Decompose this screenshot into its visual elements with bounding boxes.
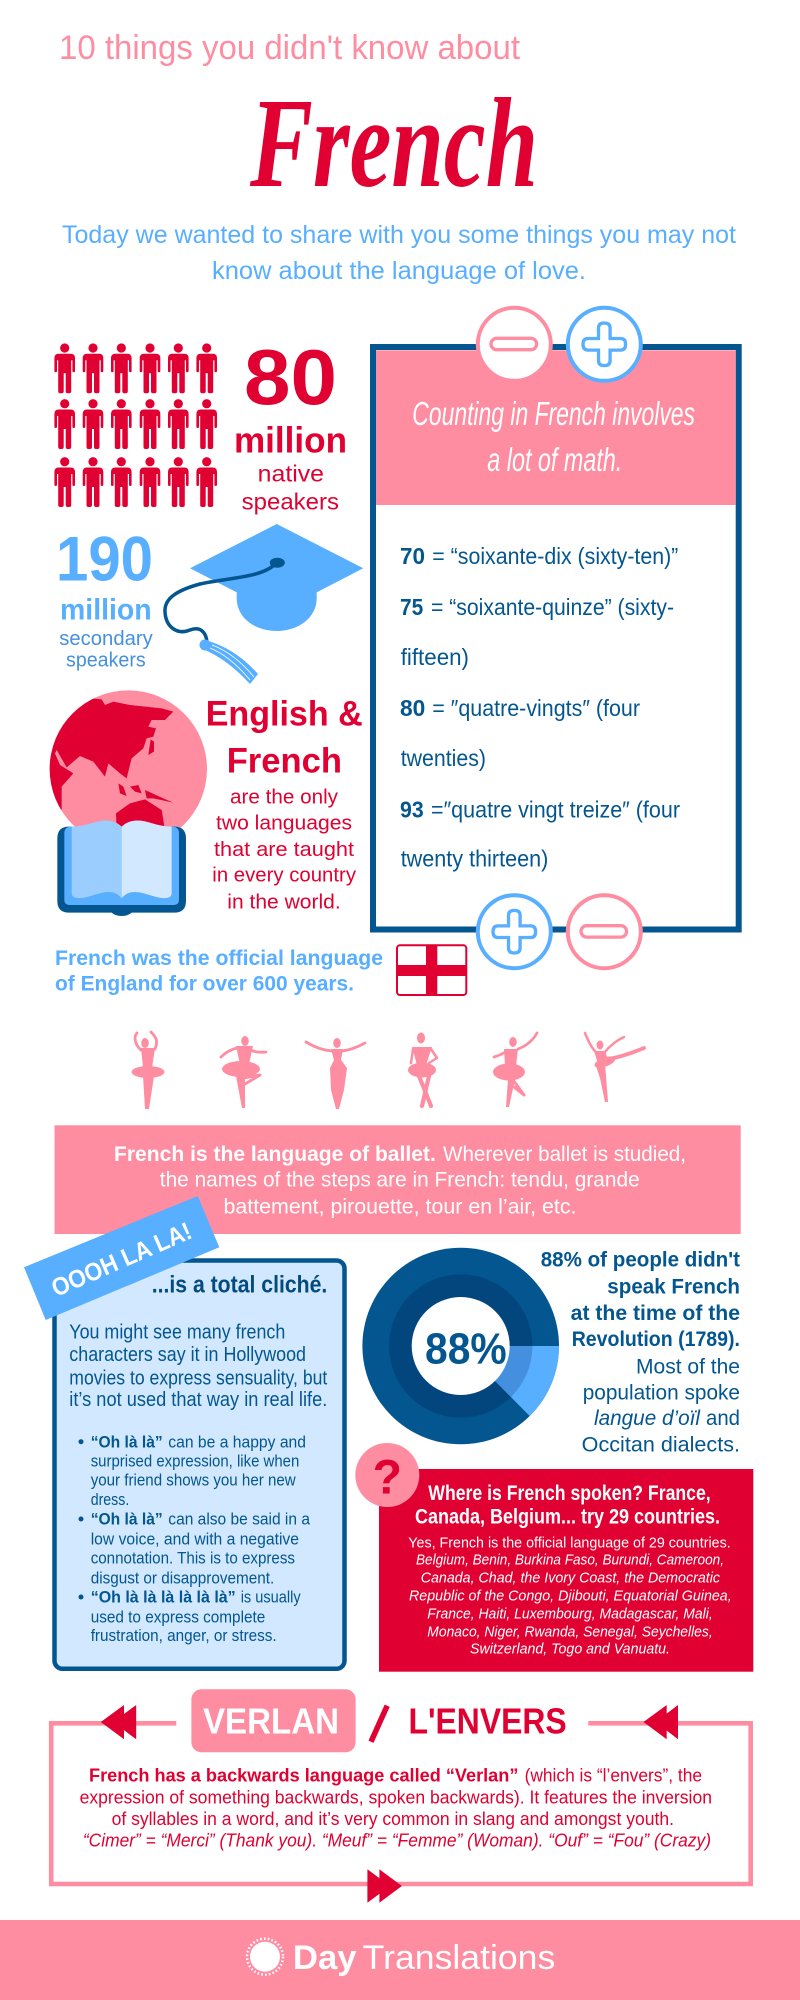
bullet list: surprised expression, like when [91,1453,299,1471]
heading: 10 things: 10 things you didn't know about [59,29,521,67]
text: Verlan explanation: French has a backwards language called “Verlan” [89,1765,518,1786]
list of numbers: 80 [400,695,425,721]
panel: counting in French [373,347,739,930]
bullet list: dress. [91,1491,129,1509]
list of numbers: fifteen) [401,644,469,670]
icon: question mark [355,1443,419,1507]
icon: minus top [478,308,551,381]
country list: Canada, Chad, the Ivory Coast, the Democratic [421,1569,720,1586]
icon: question mark: ? [373,1451,402,1504]
panel heading [415,1482,720,1528]
logo wordmark: Translations [363,1939,555,1977]
panel: where French is spoken [355,1443,753,1672]
text: Verlan explanation: of syllables in a word, and it’s very common in slang and amongst youth. [112,1808,674,1829]
icon: ballerina silhouettes [132,1032,644,1109]
frame: Verlan section border [51,1723,751,1884]
intro text [62,221,736,285]
country list [408,1534,732,1657]
panel: cliché box [54,1260,344,1669]
list of numbers [400,543,680,872]
text: 88 percent fact: langue d’oïl [594,1407,701,1430]
ballerina 3 [306,1038,365,1109]
text: Verlan explanation: expression of something backwards, spoken backwards). It features the inversion [80,1786,712,1807]
text: 88 percent fact: at the time of the [571,1302,740,1325]
title: French: French [249,72,538,214]
ballerina 5 [493,1033,537,1107]
text: English and French taught everywhere [206,695,363,914]
text: 88 percent fact [541,1249,740,1457]
text: English and French taught everywhere: that are taught [214,838,354,861]
text: English and French taught everywhere: two languages [216,811,352,834]
heading: Verlan [191,1689,356,1752]
stat: 80 million native speakers: million [234,420,347,461]
intro paragraph: characters say it in Hollywood [69,1344,306,1366]
country list: Republic of the Congo, Djibouti, Equatorial Guinea, [409,1587,732,1604]
text: English and French taught everywhere: English & [206,695,363,734]
country list: Belgium, Benin, Burkina Faso, Burundi, Cameroon, [416,1551,724,1568]
country list: Switzerland, Togo and Vanuatu. [470,1640,670,1657]
bullet list: “Oh là là” [91,1433,163,1451]
panel: ballet banner: Wherever ballet is studied, [443,1142,686,1166]
list of numbers: twenties) [401,745,486,771]
chart: 88 percent donut: 88% [425,1324,507,1373]
intro paragraph: it’s not used that way in real life. [69,1389,327,1411]
stat: 80 million native speakers: native [258,461,324,487]
bullet list: low voice, and with a negative [91,1530,299,1548]
header text [412,395,695,478]
logo wordmark: Day [293,1939,357,1977]
panel: ballet banner [54,1125,741,1234]
heading: Verlan: VERLAN [203,1700,339,1741]
icon: plus bottom [478,895,551,968]
panel heading: Where is French spoken? France, [428,1482,711,1505]
bullet list: can also be said in a [168,1510,311,1528]
stat: 80 million native speakers: 80 [244,333,337,421]
arrow: top right [644,1705,678,1739]
bullet list: “Oh là là là là là là” [91,1588,236,1606]
bullet list: is usually [241,1588,301,1606]
text: 88 percent fact: and [706,1407,740,1430]
logo icon [247,1939,283,1975]
footer [0,1920,800,2000]
intro paragraph: You might see many french [69,1321,285,1343]
text: 88 percent fact: 88% of people didn't [541,1249,740,1272]
icon: globe with book [43,690,207,916]
stat: 190 million secondary speakers [56,525,153,672]
chart: 88 percent donut [362,1248,559,1444]
icon: minus bottom [568,895,641,968]
ballerina 4 [408,1032,437,1106]
list of numbers: = “soixante-dix (sixty-ten)” [432,543,678,569]
ribbon: OOOH LA LA [24,1196,219,1320]
text: official language of England: French was the official language [55,947,383,970]
list of numbers: = ″quatre-vingts″ (four [432,695,640,721]
bullet list [78,1433,311,1645]
stat: 80 million native speakers [234,333,347,514]
panel header [376,350,736,505]
text: 88 percent fact: speak French [607,1275,740,1298]
text: Verlan explanation [80,1765,712,1851]
stat: 80 million native speakers: speakers [242,488,339,514]
text: 88 percent fact: Most of the [636,1355,740,1378]
stat: 190 million secondary speakers: speakers [66,650,146,672]
intro paragraph [69,1321,328,1411]
heading: L'envers: L'ENVERS [408,1700,567,1741]
bullet list: frustration, anger, or stress. [91,1627,277,1645]
list of numbers: 75 [400,594,423,620]
text: Verlan explanation: (which is “l’envers”, the [525,1765,702,1786]
ribbon: OOOH LA LA: OOOH LA LA! [47,1217,196,1303]
text: English and French taught everywhere: are the only [230,785,339,808]
bullet list: used to express complete [91,1608,265,1626]
text: official language of England: of England for over 600 years. [55,973,354,996]
list of numbers: 93 [400,796,424,822]
country list: Monaco, Niger, Rwanda, Senegal, Seychelles, [427,1623,713,1640]
panel heading: Canada, Belgium... try 29 countries. [415,1505,720,1528]
ballerina 1 [132,1032,164,1109]
arrow: top left [101,1705,136,1739]
heading: slash [371,1706,387,1742]
panel: ballet banner: French is the language of ballet. [114,1142,436,1166]
intro paragraph: movies to express sensuality, but [69,1367,328,1389]
list of numbers: 70 [400,543,425,569]
text: 88 percent fact: population spoke [583,1381,740,1404]
stat: 190 million secondary speakers: secondary [59,628,153,650]
panel: ballet banner: the names of the steps are in French: tendu, grande [160,1168,640,1192]
bullet list: connotation. This is to express [91,1549,295,1567]
list of numbers: twenty thirteen) [401,846,548,872]
text: Verlan explanation: “Cimer” = “Merci” (Thank you). “Meuf” = “Femme” (Woman). “Ouf” = “Fou” (Crazy) [83,1830,711,1851]
text: 88 percent fact: Revolution (1789). [572,1328,740,1351]
arrow: bottom [367,1869,402,1903]
panel: ballet banner: battement, pirouette, tour en l’air, etc. [224,1194,576,1218]
ballerina 6 [585,1033,644,1102]
bullet list: disgust or disapprovement. [91,1569,274,1587]
icon: people pictogram [54,343,217,507]
icon: plus top [568,308,641,381]
text: English and French taught everywhere: in every country [212,864,357,887]
sub-heading: total cliché: ...is a total cliché. [152,1272,327,1299]
text: English and French taught everywhere: French [227,742,342,781]
bullet list: “Oh là là” [91,1510,163,1528]
intro text: Today we wanted to share with you some things you may not [62,221,736,249]
text: official language of England [55,947,383,996]
stat: 190 million secondary speakers: million [60,593,152,626]
intro text: know about the language of love. [212,257,586,285]
ballerina 2 [221,1036,266,1108]
list of numbers: =″quatre vingt treize″ (four [431,796,680,822]
bullet list: can be a happy and [168,1433,306,1451]
text: 88 percent fact: Occitan dialects. [582,1434,740,1457]
country list: Yes, French is the official language of 29 countries. [408,1534,731,1551]
icon: English flag [397,945,466,995]
bullet list: your friend shows you her new [91,1472,296,1490]
header text: a lot of math. [487,441,622,478]
country list: France, Haiti, Luxembourg, Madagascar, Mali, [427,1605,713,1622]
list of numbers: = “soixante-quinze” (sixty- [431,594,674,620]
text: English and French taught everywhere: in the world. [227,891,341,914]
stat: 190 million secondary speakers: 190 [56,525,153,595]
icon: graduation cap [165,524,363,684]
